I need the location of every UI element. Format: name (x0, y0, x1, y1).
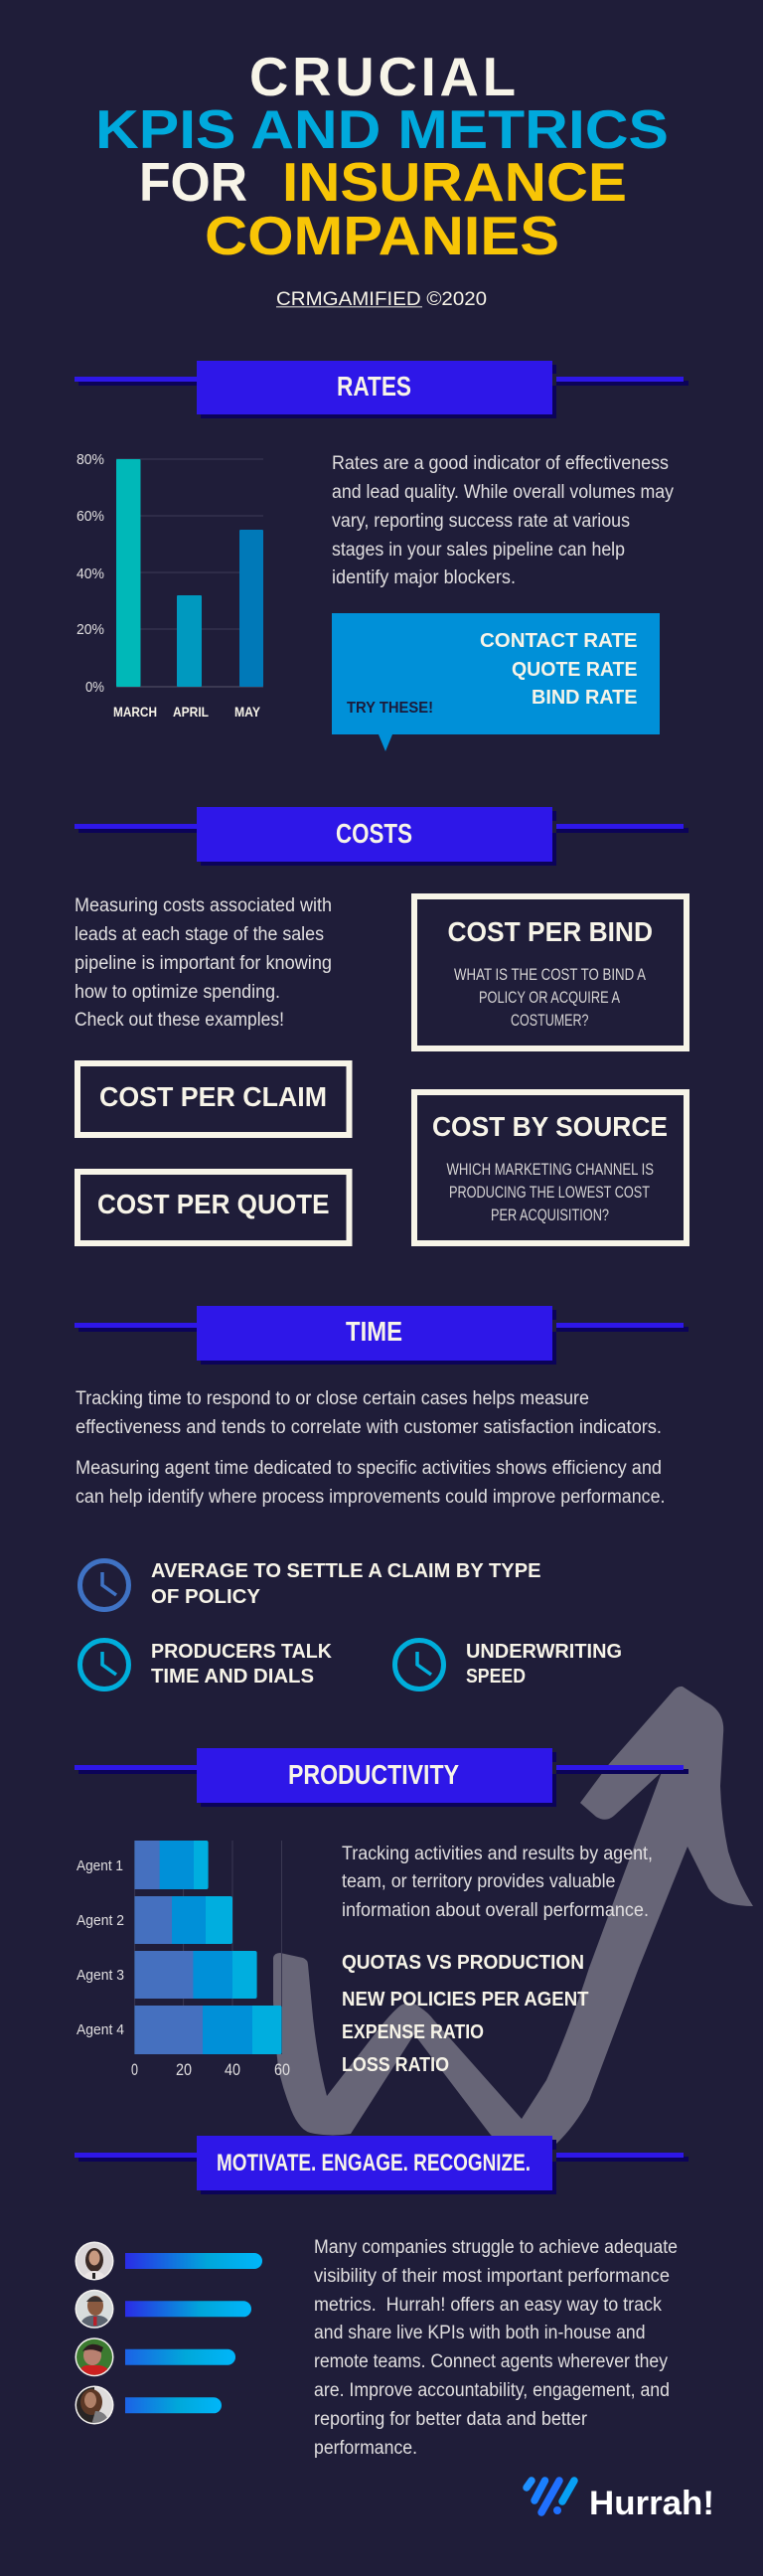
list: productivity metrics: LOSS RATIO (342, 2054, 449, 2076)
list: productivity metrics: NEW POLICIES PER AGENT (342, 1989, 588, 2011)
bar chart: rates by month: 40% (76, 565, 104, 582)
avatar: agent one (76, 2242, 113, 2280)
icon: clock producers (79, 1640, 129, 1690)
text: time intro: effectiveness and tends to correlate with customer satisfaction indicators. (76, 1417, 662, 1438)
text: rates intro: Rates are a good indicator of effectiveness (332, 453, 669, 474)
text: time intro: can help identify where process improvements could improve performance. (76, 1487, 666, 1508)
text: producers talk: PRODUCERS TALK (151, 1641, 333, 1663)
text: underwriting speed: UNDERWRITING (466, 1641, 622, 1663)
text: rates intro (332, 453, 674, 588)
stacked bar chart: agents: 0 (131, 2061, 138, 2079)
callout: try these: TRY THESE! (347, 700, 433, 717)
logo: hurrah (527, 2481, 714, 2522)
text: motivate body: are. Improve accountability, engagement, and (314, 2380, 670, 2401)
text: average to settle (151, 1560, 540, 1608)
stacked bar chart: agents: Agent 2 (76, 1912, 124, 1929)
text: underwriting speed: SPEED (466, 1666, 526, 1688)
avatar: agent two (75, 2290, 114, 2330)
bar chart: rates by month: MARCH (113, 704, 157, 720)
stacked bar chart: agents: 40 (225, 2061, 240, 2079)
panel: cost per bind: POLICY OR ACQUIRE A (479, 989, 620, 1007)
bar chart: rates by month: 80% (76, 451, 104, 468)
text: time intro: Tracking time to respond to or close certain cases helps measure (76, 1388, 589, 1409)
panel: cost by source (414, 1092, 687, 1243)
title (95, 47, 669, 266)
text: costs intro: Check out these examples! (75, 1010, 284, 1031)
subtitle credit: CRMGAMIFIED ©2020 (276, 289, 487, 310)
section header: time: TIME (346, 1316, 402, 1347)
title: KPIS AND METRICS (95, 99, 669, 160)
callout: try these: QUOTE RATE (512, 659, 638, 681)
text: time intro (76, 1388, 666, 1508)
stacked bar chart: agents: Agent 4 (76, 2021, 124, 2038)
progress bars (125, 2253, 262, 2413)
bar chart: rates by month: 60% (76, 508, 104, 525)
bar chart: rates by month: 20% (76, 621, 104, 638)
section header: rates (75, 361, 688, 418)
text: producers talk: TIME AND DIALS (151, 1666, 314, 1688)
section header: costs: COSTS (336, 818, 412, 849)
text: producers talk (151, 1641, 333, 1688)
title: FOR (139, 152, 247, 213)
stacked bar chart: agents: Agent 1 (76, 1857, 123, 1874)
text: average to settle: AVERAGE TO SETTLE A CLAIM BY TYPE (151, 1560, 540, 1582)
bar chart: rates by month (76, 451, 263, 720)
text: motivate body: remote teams. Connect agents wherever they (314, 2351, 668, 2372)
section header: productivity (75, 1748, 688, 1807)
stacked bar chart: agents: 60 (274, 2061, 290, 2079)
callout: try these: BIND RATE (532, 687, 638, 709)
panel: cost by source: WHICH MARKETING CHANNEL IS (447, 1161, 654, 1179)
text: motivate body: visibility of their most important performance (314, 2266, 670, 2287)
list: productivity metrics: QUOTAS VS PRODUCTION (342, 1952, 584, 1974)
text: rates intro: vary, reporting success rate at various (332, 511, 630, 532)
panel: cost per claim: COST PER CLAIM (99, 1081, 327, 1112)
text: costs intro: Measuring costs associated with (75, 895, 332, 916)
section header: motivate: MOTIVATE. ENGAGE. RECOGNIZE. (217, 2150, 531, 2176)
text: productivity intro: team, or territory provides valuable (342, 1871, 616, 1892)
text: time intro: Measuring agent time dedicated to specific activities shows efficiency and (76, 1458, 662, 1479)
callout: try these: CONTACT RATE (480, 630, 638, 652)
text: costs intro: pipeline is important for knowing (75, 953, 332, 974)
avatar: agent four (75, 2385, 114, 2425)
panel: cost per claim (77, 1063, 350, 1135)
panel: cost per quote: COST PER QUOTE (97, 1189, 330, 1219)
text: costs intro: leads at each stage of the sales (75, 924, 324, 945)
stacked bar chart: agents: 20 (176, 2061, 192, 2079)
text: productivity intro (342, 1844, 653, 1921)
text: productivity intro: Tracking activities and results by agent, (342, 1844, 653, 1864)
stacked bar chart: agents: Agent 3 (76, 1967, 124, 1984)
text: rates intro: and lead quality. While overall volumes may (332, 482, 674, 503)
panel: cost by source: COST BY SOURCE (432, 1111, 668, 1142)
panel: cost per quote (77, 1172, 350, 1243)
text: costs intro (75, 895, 332, 1031)
panel: cost per bind: WHAT IS THE COST TO BIND A (454, 966, 646, 984)
panel: cost per bind: COSTUMER? (511, 1012, 588, 1030)
list: productivity metrics (342, 1952, 588, 2076)
list: productivity metrics: EXPENSE RATIO (342, 2021, 484, 2043)
text: motivate body: metrics. Hurrah! offers an easy way to track (314, 2295, 662, 2316)
text: motivate body: performance. (314, 2438, 417, 2459)
panel: cost per bind: COST PER BIND (447, 916, 653, 947)
text: rates intro: stages in your sales pipeline can help (332, 540, 625, 561)
logo: hurrah: Hurrah! (589, 2485, 714, 2522)
panel: cost by source: PRODUCING THE LOWEST COST (449, 1184, 650, 1202)
text: costs intro: how to optimize spending. (75, 982, 280, 1003)
text: motivate body (314, 2237, 678, 2459)
icon: clock settle claim (79, 1560, 129, 1610)
title: CRUCIAL (249, 47, 516, 107)
text: motivate body: reporting for better data and better (314, 2409, 588, 2430)
icon: clock underwriting (395, 1640, 443, 1690)
panel: cost by source: PER ACQUISITION? (491, 1207, 609, 1224)
text: motivate body: and share live KPIs with both in-house and (314, 2323, 646, 2343)
section header: time (75, 1306, 688, 1365)
section header: costs (75, 807, 688, 866)
bar chart: rates by month: 0% (85, 679, 104, 696)
text: average to settle: OF POLICY (151, 1586, 261, 1608)
avatar: agent three (75, 2337, 114, 2377)
panel: cost per bind (414, 896, 687, 1048)
title: COMPANIES (205, 206, 559, 266)
stacked bar chart: agents (76, 1841, 290, 2079)
text: underwriting speed (466, 1641, 622, 1688)
section header: motivate (75, 2136, 688, 2194)
text: rates intro: identify major blockers. (332, 567, 516, 588)
section header: rates: RATES (337, 371, 411, 402)
section header: productivity: PRODUCTIVITY (288, 1759, 459, 1790)
bar chart: rates by month: APRIL (173, 704, 209, 720)
text: productivity intro: information about overall performance. (342, 1900, 649, 1921)
text: motivate body: Many companies struggle to achieve adequate (314, 2237, 678, 2258)
callout: try these (332, 613, 660, 751)
bar chart: rates by month: MAY (234, 704, 261, 720)
background arrow (273, 1687, 753, 2152)
title: INSURANCE (282, 152, 627, 213)
